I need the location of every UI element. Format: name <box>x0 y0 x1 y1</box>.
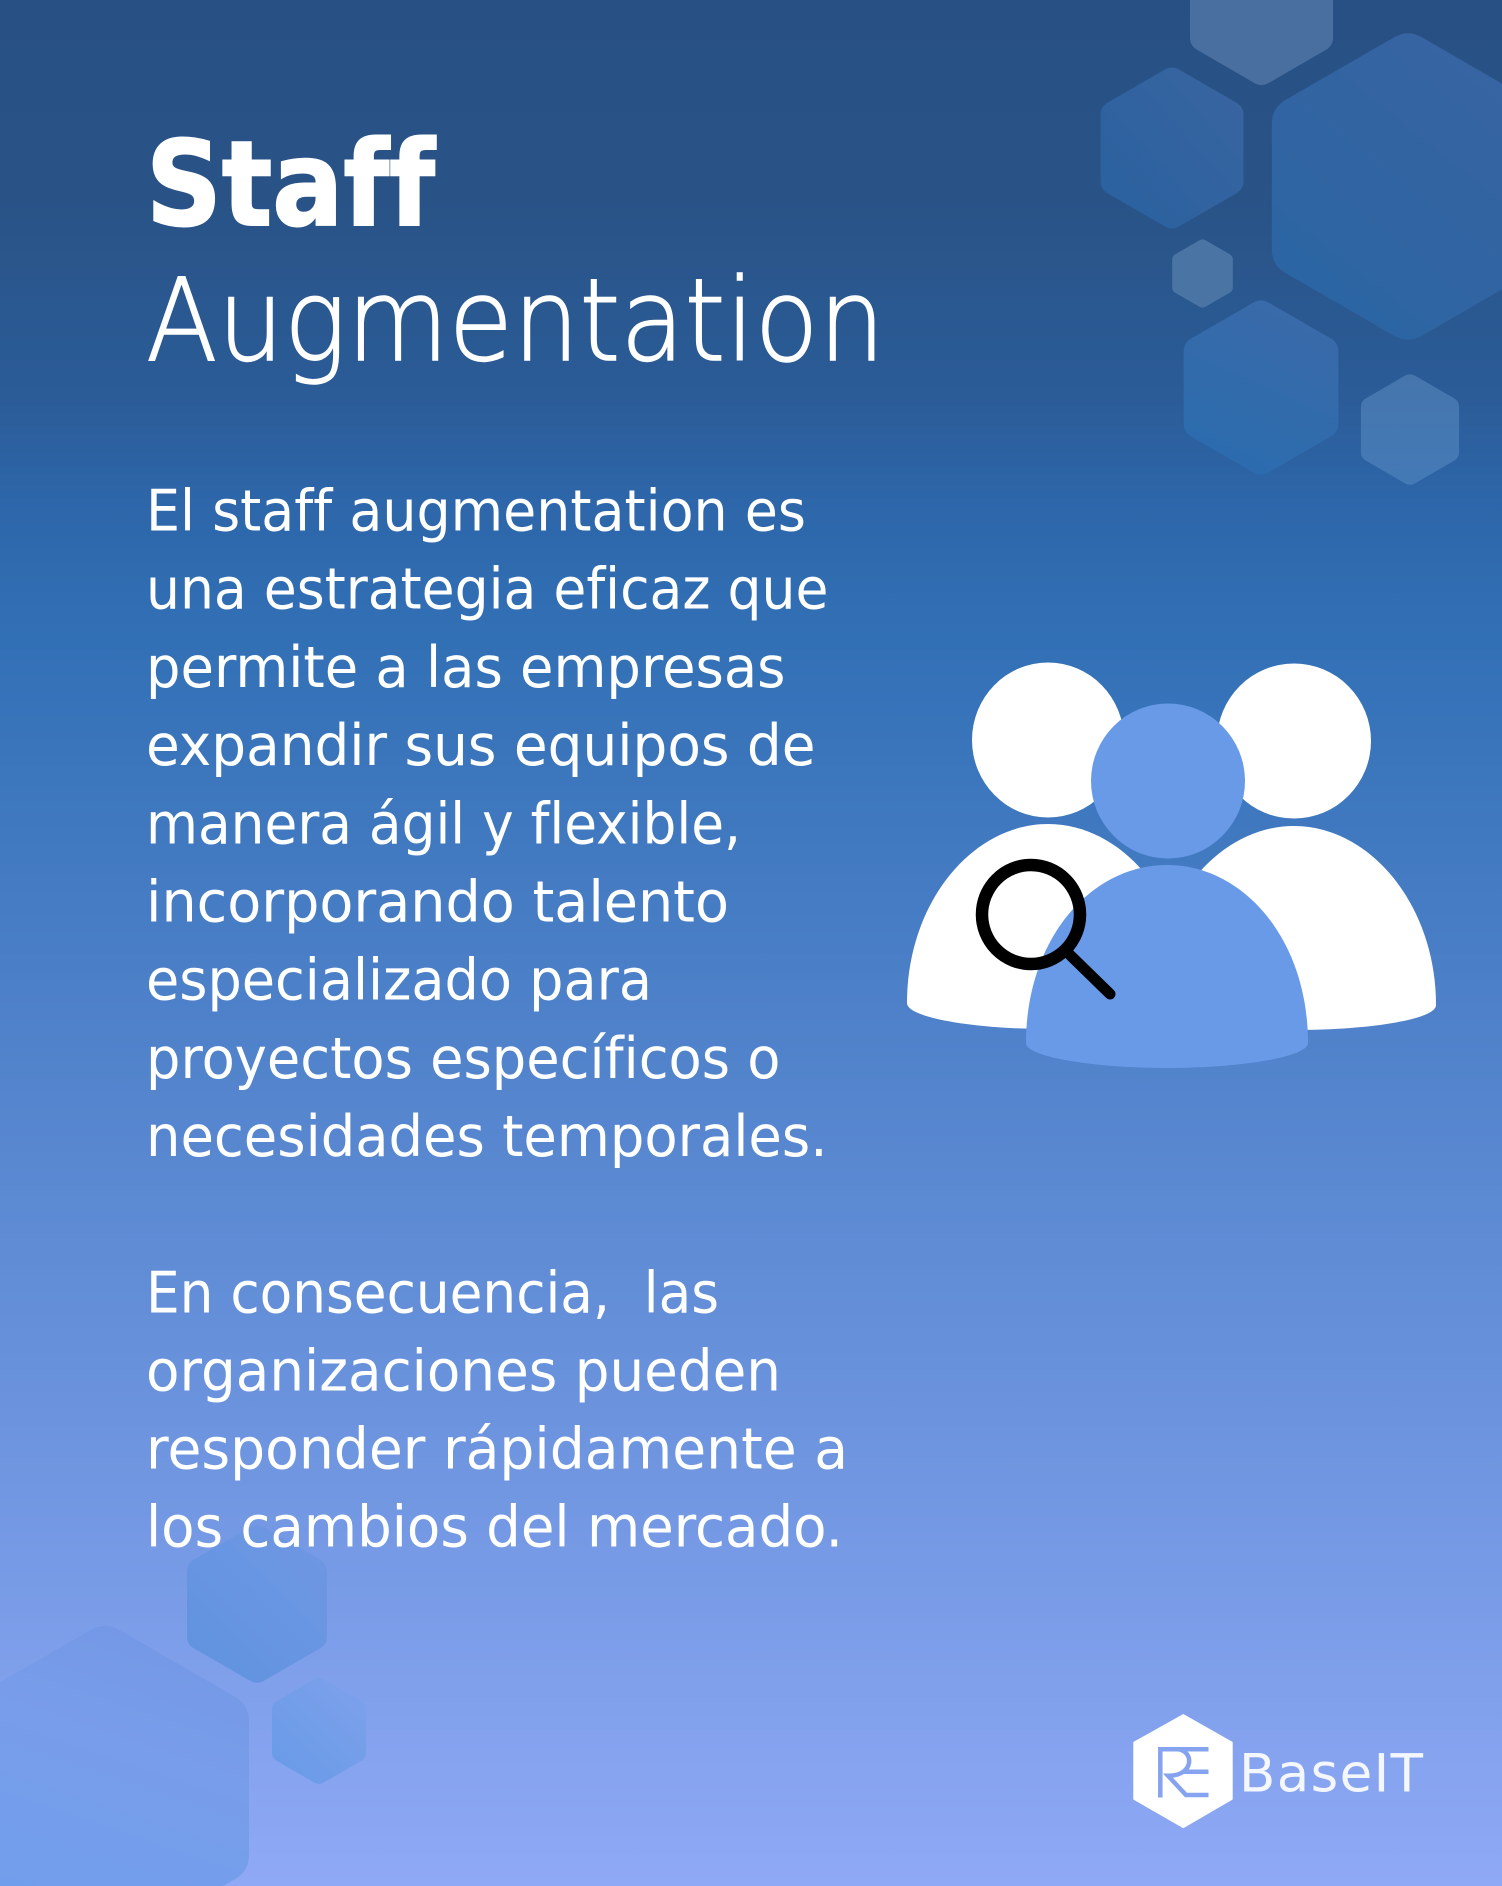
title: bold line: Staff <box>146 115 436 253</box>
paragraph: definition: El staff augmentation es <box>146 478 806 544</box>
paragraph: consequence <box>146 1260 848 1560</box>
icon: left person <box>907 662 1189 1029</box>
paragraph: definition: especializado para <box>146 948 652 1014</box>
paragraph: definition: una estrategia eficaz que <box>146 557 828 623</box>
icon: right person <box>1152 664 1436 1030</box>
icon: centre person <box>1026 704 1308 1068</box>
paragraph: consequence: organizaciones pueden <box>146 1338 781 1404</box>
paragraph: consequence: En consecuencia, las <box>146 1260 719 1326</box>
logo: wordmark: BaseIT <box>1239 1744 1424 1805</box>
paragraph: definition: incorporando talento <box>146 870 729 936</box>
paragraph: consequence: responder rápidamente a <box>146 1416 848 1482</box>
logo: hexagon mark <box>1133 1714 1233 1828</box>
icon: magnifying glass <box>982 865 1110 994</box>
title <box>146 115 885 387</box>
paragraph: consequence: los cambios del mercado. <box>146 1494 843 1560</box>
title: light line: Augmentation <box>146 254 885 387</box>
paragraph: definition: manera ágil y flexible, <box>146 791 741 857</box>
paragraph: definition: permite a las empresas <box>146 635 786 701</box>
icon: team of people with magnifying glass <box>907 662 1436 1068</box>
logo: BaseIT <box>1133 1714 1424 1828</box>
paragraph: definition: necesidades temporales. <box>146 1104 828 1170</box>
paragraph: definition <box>146 478 828 1170</box>
paragraph: definition: proyectos específicos o <box>146 1026 780 1092</box>
paragraph: definition: expandir sus equipos de <box>146 713 816 779</box>
decorative hexagons: top right <box>1101 0 1502 485</box>
decorative hexagons: bottom left <box>0 1525 366 1886</box>
